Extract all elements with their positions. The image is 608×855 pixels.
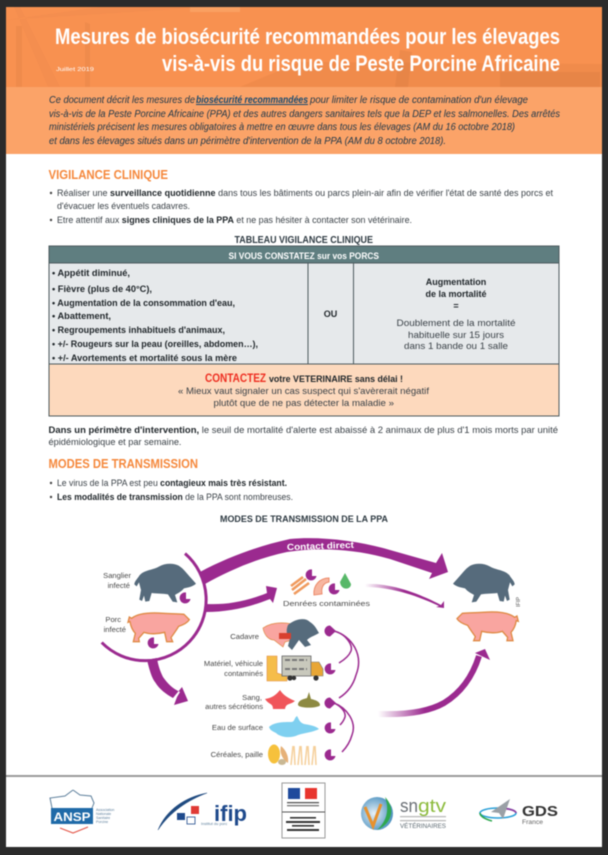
intro block: Ce document décrit les mesures de — [49, 95, 195, 106]
intro block — [6, 87, 602, 154]
intro block: et dans les élevages situés dans un périmètre d'intervention de la PPA (AM du 8 octobre 2018). — [49, 136, 446, 147]
signs list: • Fièvre (plus de 40°C), — [52, 284, 152, 294]
intro block: biosécurité recommandées — [196, 95, 308, 106]
logo: ANSP: Association — [96, 808, 114, 812]
transmission bullets — [50, 478, 293, 502]
logo: ANSP: Porcine — [96, 820, 108, 824]
table header: SI VOUS CONSTATEZ sur vos PORCS — [228, 251, 380, 262]
icon: cereals and straw — [268, 744, 316, 765]
label: porc infecté: infecté — [104, 625, 126, 634]
icon: blood and secretions — [265, 690, 320, 709]
signs list: • +/- Avortements et mortalité sous la mère — [52, 353, 237, 363]
mortality cell: habituelle sur 15 jours — [408, 330, 505, 340]
perimeter paragraph — [48, 425, 558, 447]
label: matériel, véhicule contaminés: Matériel, véhicule — [204, 659, 263, 668]
contact box: CONTACTEZ — [205, 373, 266, 385]
label: porc infecté: Porc — [105, 615, 121, 624]
label: sanglier infecté — [103, 571, 131, 590]
icon: receiving pig — [457, 612, 518, 641]
label: matériel, véhicule contaminés — [204, 659, 263, 678]
label: céréales, paille: Céréales, paille — [211, 750, 263, 759]
mortality cell: = — [453, 301, 459, 311]
header banner — [6, 7, 602, 87]
intro block: ministériels précisent les mesures obligatoires à mettre en œuvre dans tous les élevages (AM du 16 octobre 2018) — [49, 122, 515, 133]
credit: IFIP: IFIP — [516, 597, 522, 607]
table header — [49, 246, 559, 263]
label: cadavre: Cadavre — [230, 632, 259, 641]
icon: boot and truck — [267, 656, 323, 681]
arrow: contaminated food to receivers — [365, 584, 444, 608]
transmission bullets: Le virus de la PPA est peu contagieux mais très résistant. — [57, 478, 287, 488]
signs list: • Abattement, — [52, 311, 111, 321]
mortality cell — [396, 277, 516, 351]
mortality cell: Augmentation — [426, 277, 486, 287]
logo: ifip — [158, 793, 247, 830]
source circle arc — [102, 554, 206, 661]
logo: ANSP: Nationale — [96, 812, 111, 816]
arrow: to contaminated food — [206, 586, 277, 612]
arrow: contact direct — [200, 538, 448, 584]
intro block: pour limiter le risque de contamination d'un élevage — [309, 95, 528, 106]
arrow: to indirect sources — [147, 658, 188, 705]
icon: contaminated food — [291, 573, 351, 595]
signs list — [52, 268, 258, 363]
label: sanglier infecté: Sanglier — [103, 571, 131, 580]
arrow: indirect to receivers — [378, 649, 490, 714]
label: sang, autres sécrétions: Sang, — [242, 693, 262, 702]
mortality cell: de la mortalité — [425, 289, 487, 299]
logo: sngtv: VÉTÉRINAIRES — [400, 823, 446, 830]
logo: sngtv: gtv — [418, 796, 446, 816]
date: Juillet 2019 — [56, 67, 94, 73]
transmission diagram — [102, 538, 522, 765]
icon: receiving boar — [453, 564, 515, 602]
contact box: « Mieux vaut signaler un cas suspect qui s'avèrerait négatif — [178, 386, 430, 396]
footer divider — [6, 775, 602, 777]
vigilance bullets: d'évacuer les éventuels cadavres. — [57, 201, 190, 211]
label: sang, autres sécrétions: autres sécrétions — [205, 702, 263, 711]
vigilance bullets — [50, 188, 553, 225]
logo: ministère — [282, 783, 325, 838]
icon: water puddle — [269, 716, 319, 737]
signs list: • Appétit diminué, — [52, 268, 130, 278]
diagram title: MODES DE TRANSMISSION DE LA PPA — [220, 514, 388, 525]
logo: sngtv: sn — [400, 796, 418, 816]
contact box: votre VETERINAIRE sans délai ! — [269, 374, 403, 384]
label: eau de surface: Eau de surface — [212, 723, 263, 732]
logo: sngtv — [361, 796, 446, 830]
mortality cell: Doublement de la mortalité — [396, 318, 516, 328]
icon: infected boar — [134, 564, 196, 602]
contact box — [49, 364, 559, 416]
logo: ifip: ifip — [214, 801, 247, 826]
OU: OU — [324, 309, 337, 319]
arrow: contact direct: Contact direct — [287, 540, 354, 552]
logo: ANSP — [50, 790, 114, 833]
perimeter paragraph: épidémiologique et par semaine. — [48, 437, 182, 447]
curved links between indirect sources — [334, 631, 359, 752]
signs list: • Augmentation de la consommation d'eau, — [52, 298, 235, 308]
logo: ANSP: ANSP — [54, 812, 91, 824]
heading: vigilance clinique: VIGILANCE CLINIQUE — [48, 168, 168, 182]
signs list: • Regroupements inhabituels d'animaux, — [52, 325, 225, 335]
contact box: plutôt que de ne pas détecter la maladie » — [214, 398, 394, 408]
icons: virus markers — [148, 569, 340, 760]
icon: infected pig — [128, 613, 189, 642]
label: matériel, véhicule contaminés: contaminés — [224, 669, 263, 678]
heading: modes de transmission: MODES DE TRANSMISSION — [48, 457, 198, 471]
logo: GDS France: France — [522, 819, 543, 826]
perimeter paragraph: Dans un périmètre d'intervention, le seuil de mortalité d'alerte est abaissé à 2 animaux de plus d'1 mois morts par unité — [48, 425, 558, 435]
table title: TABLEAU VIGILANCE CLINIQUE — [234, 235, 373, 246]
icon: carcasses — [263, 619, 319, 650]
vigilance bullets: Réaliser une surveillance quotidienne dans tous les bâtiments ou parcs plein-air afin de vérifier l'état de santé des porcs et — [57, 188, 553, 198]
vigilance bullets: Etre attentif aux signes cliniques de la PPA et ne pas hésiter à contacter son vétérinaire. — [57, 215, 412, 225]
signs list: • +/- Rougeurs sur la peau (oreilles, abdomen…), — [52, 339, 258, 349]
transmission bullets: Les modalités de transmission de la PPA sont nombreuses. — [57, 492, 293, 502]
label: porc infecté — [104, 615, 126, 634]
logo: GDS France: GDS — [522, 804, 558, 820]
logo: ANSP: Sanitaire — [96, 816, 110, 820]
label: denrées contaminées: Denrées contaminées — [283, 599, 370, 608]
mortality cell: dans 1 bande ou 1 salle — [404, 341, 508, 351]
intro block: vis-à-vis de la Peste Porcine Africaine (PPA) et des autres dangers sanitaires tels que la DEP et les salmonelles. Des arrêtés — [49, 109, 560, 120]
label: sang, autres sécrétions — [205, 693, 263, 711]
title — [55, 24, 560, 76]
table: vigilance clinique — [49, 246, 559, 364]
label: sanglier infecté: infecté — [108, 581, 130, 590]
logo: GDS France — [480, 799, 558, 826]
logo: ifip: Institut du porc — [201, 821, 227, 826]
